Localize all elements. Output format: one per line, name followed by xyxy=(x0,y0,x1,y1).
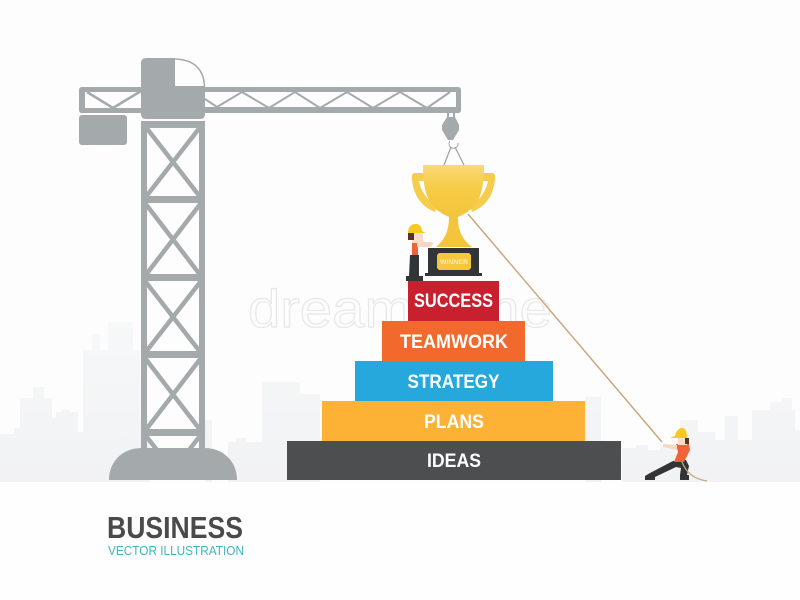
left jib xyxy=(79,87,141,113)
counterweight xyxy=(79,115,127,145)
step: teamwork: TEAMWORK xyxy=(400,332,508,353)
step: ideas xyxy=(287,441,621,480)
step: success xyxy=(408,281,499,321)
step: success: SUCCESS xyxy=(414,291,493,312)
crane xyxy=(79,58,461,480)
watermark: dreamstime xyxy=(248,280,552,339)
ground xyxy=(0,482,800,600)
left worker xyxy=(406,224,433,281)
winner plaque: WINNER xyxy=(440,259,468,266)
trophy stem xyxy=(436,217,472,247)
right jib xyxy=(205,87,461,113)
step: strategy: STRATEGY xyxy=(408,372,500,393)
crane tower xyxy=(141,121,205,451)
crane hook xyxy=(442,113,464,165)
step: plans: PLANS xyxy=(424,412,484,433)
pyramid xyxy=(287,281,621,480)
subtitle: VECTOR ILLUSTRATION xyxy=(108,543,244,558)
rope xyxy=(468,214,662,442)
trophy cup xyxy=(423,165,484,217)
right worker pulling rope xyxy=(645,428,707,481)
step: teamwork xyxy=(382,321,525,361)
step: plans xyxy=(322,401,585,441)
crane cabin xyxy=(141,58,205,119)
title: BUSINESS xyxy=(107,510,243,545)
trophy handles xyxy=(412,173,495,212)
title block xyxy=(107,510,244,558)
step: ideas: IDEAS xyxy=(427,451,481,472)
city skyline background xyxy=(0,322,800,482)
trophy pedestal xyxy=(425,248,482,276)
trophy xyxy=(412,165,495,276)
crane base xyxy=(109,448,237,480)
step: strategy xyxy=(355,361,553,401)
